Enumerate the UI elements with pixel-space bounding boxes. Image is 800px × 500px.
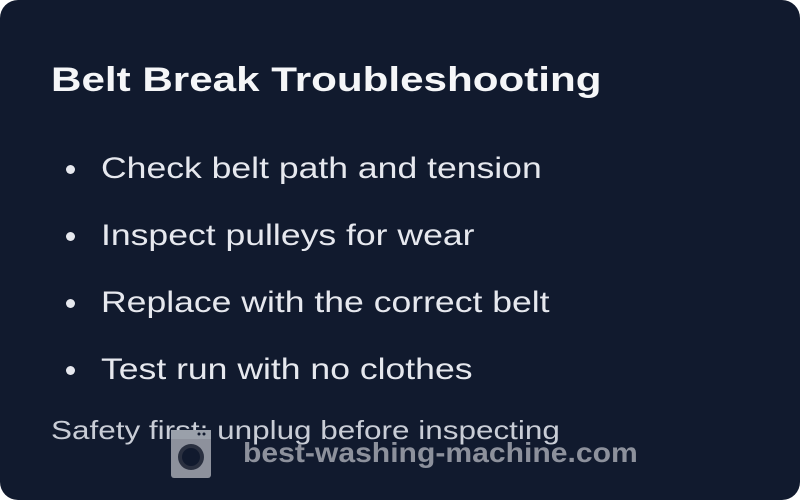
bullet: inspect pulleys: Inspect pulleys for wear [101,219,474,252]
safety note: Safety first: unplug before inspecting [51,415,560,445]
title: Belt Break Troubleshooting [51,61,602,99]
watermark text: best-washing-machine.com [243,437,638,468]
icon: washing machine [171,430,211,478]
bullet: check belt: Check belt path and tension [101,152,542,185]
bullet: test run: Test run with no clothes [101,353,472,386]
bullet list [66,152,550,386]
watermark [171,430,638,478]
bullet: replace belt: Replace with the correct belt [101,286,550,319]
